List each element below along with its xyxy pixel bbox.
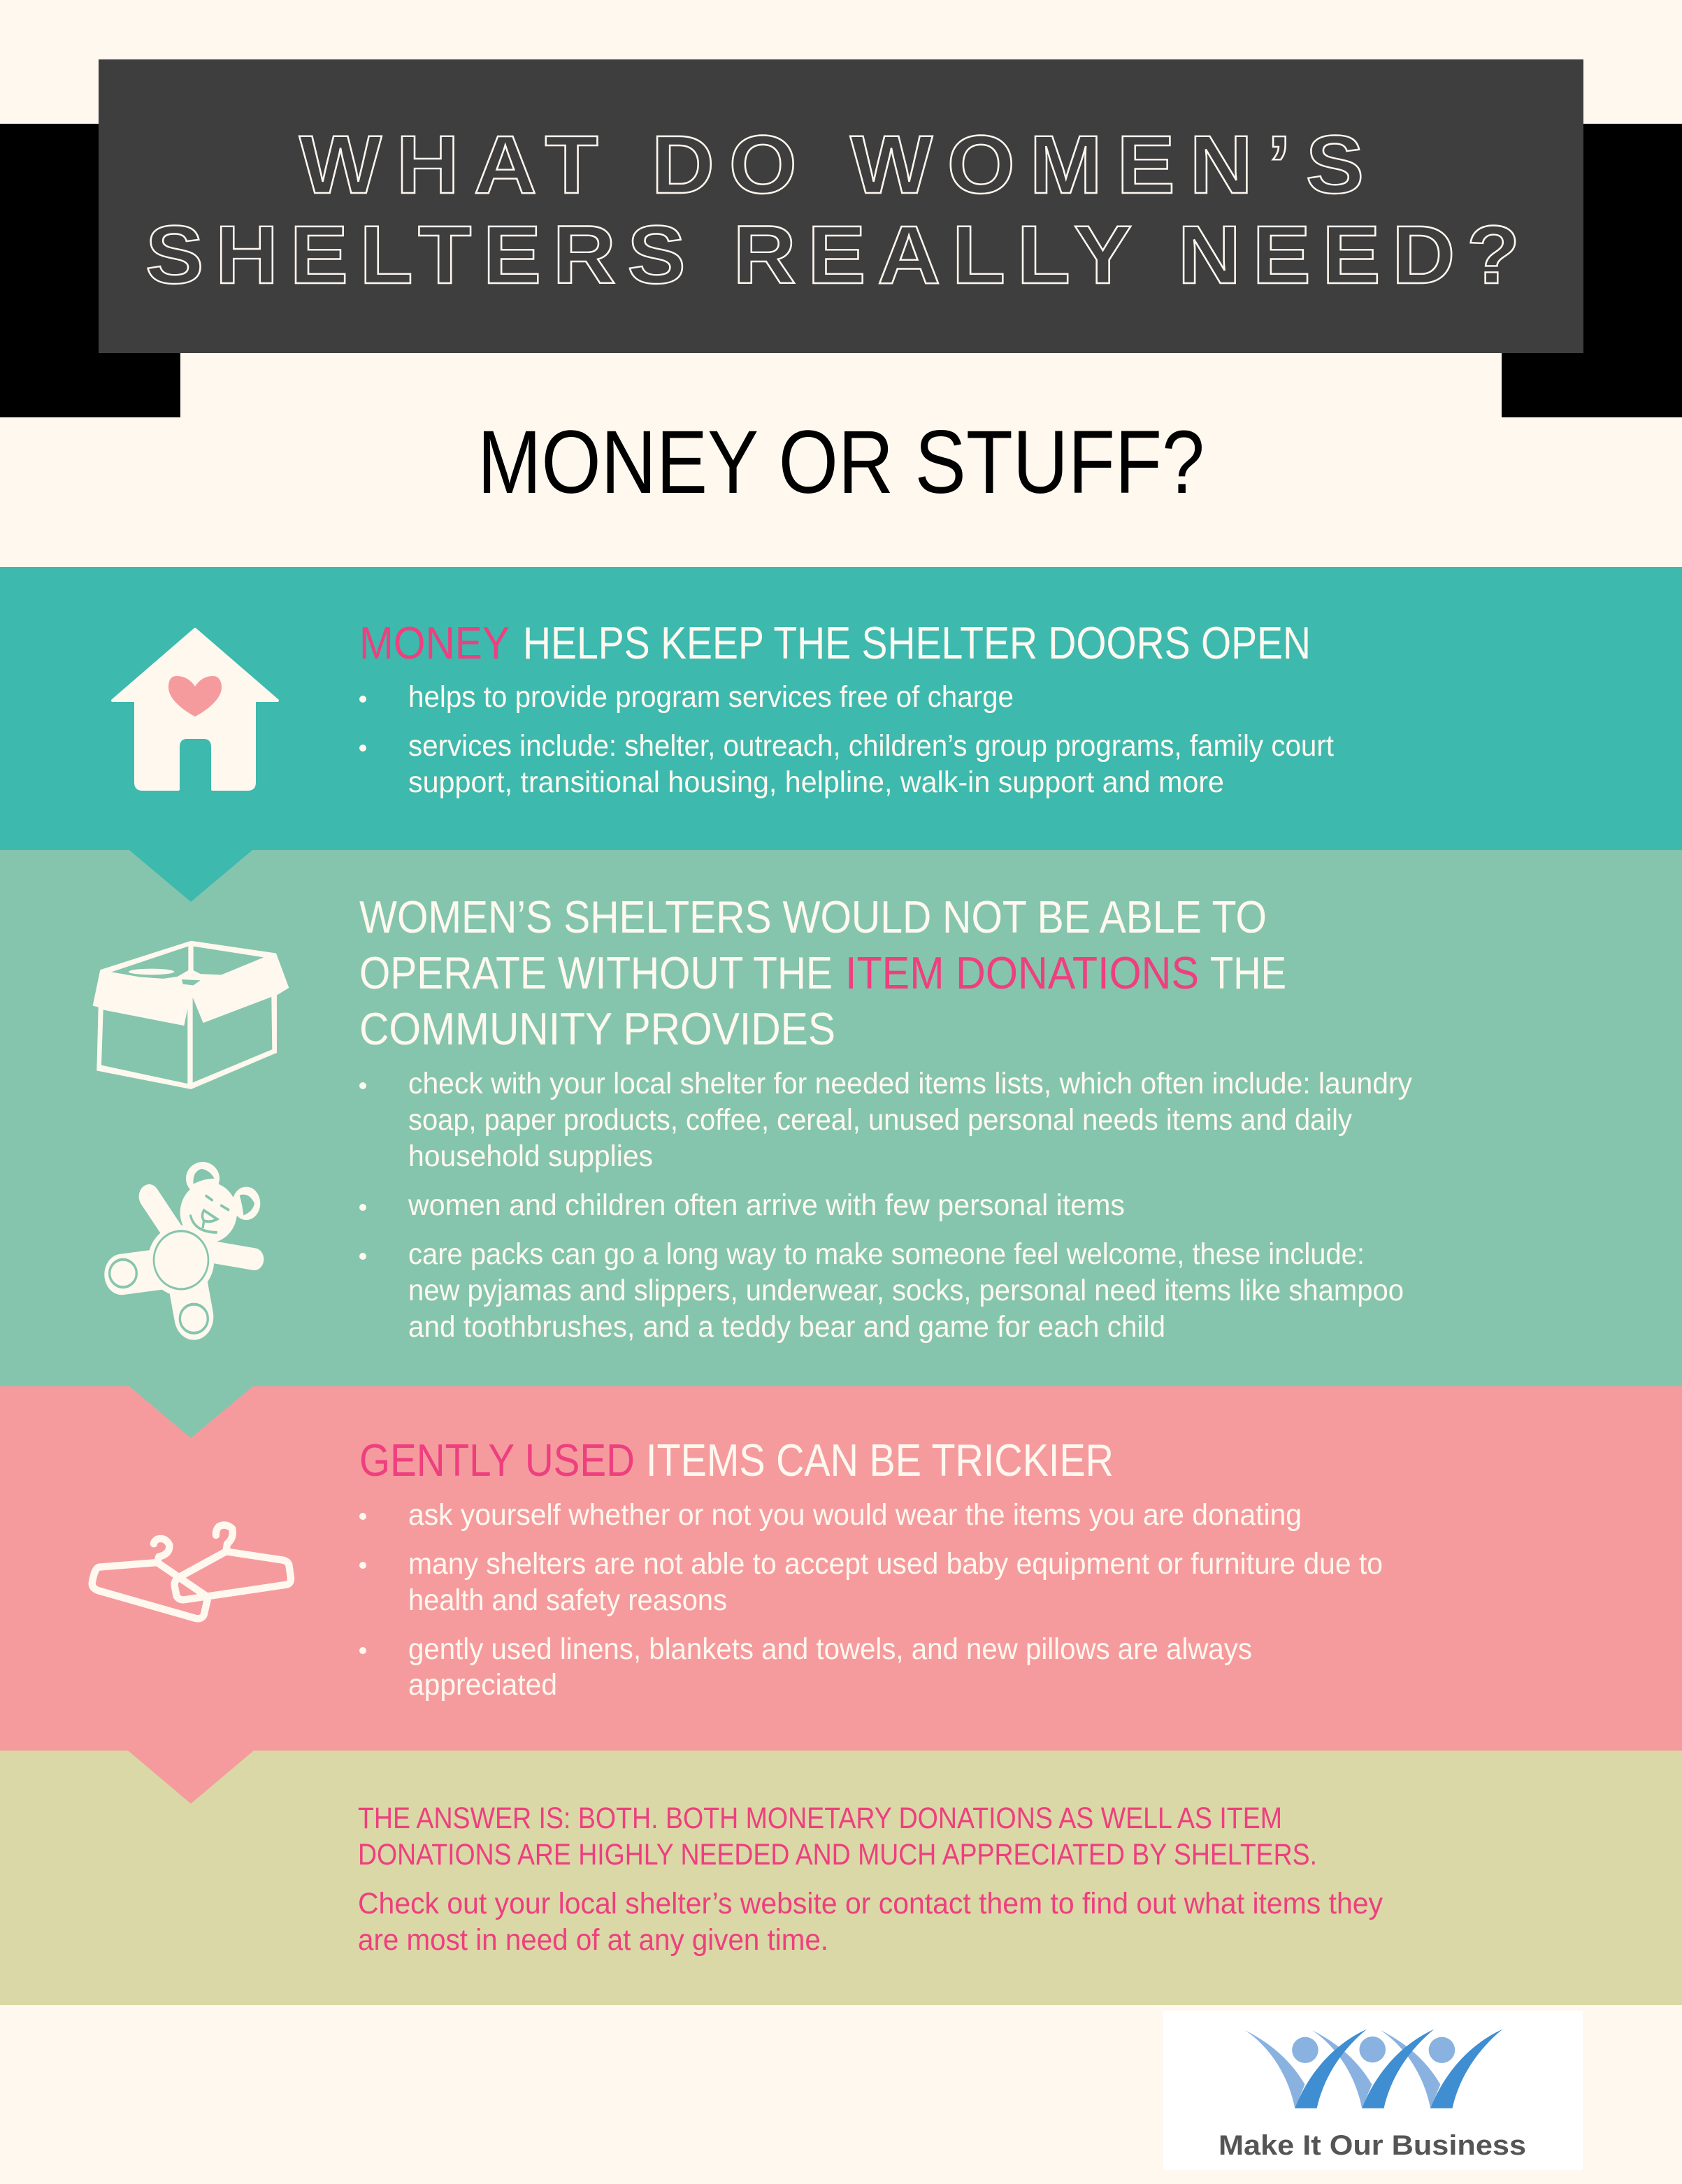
items bullet list: women and children often arrive with few personal items [408, 1188, 1125, 1222]
gently used bullet list: appreciated [408, 1668, 557, 1702]
items bullet list: new pyjamas and slippers, underwear, socks, personal need items like shampoo [408, 1274, 1404, 1307]
items bullet list: check with your local shelter for needed items lists, which often include: laundry [408, 1067, 1412, 1100]
gently used bullet list: gently used linens, blankets and towels, and new pillows are always [408, 1632, 1252, 1666]
gently used bullet list [359, 1498, 1383, 1702]
money bullet list: services include: shelter, outreach, children’s group programs, family court [408, 729, 1334, 763]
chevron: gently used to answer [128, 1751, 254, 1804]
heading: item donations: OPERATE WITHOUT THE [359, 947, 833, 998]
title: SHELTERS REALLY NEED? [145, 208, 1520, 301]
title [145, 118, 1520, 301]
items bullet list: care packs can go a long way to make someone feel welcome, these include: [408, 1237, 1365, 1271]
icon: open box [93, 941, 289, 1089]
heading: gently used [359, 1435, 1114, 1486]
heading: money: MONEY [359, 617, 510, 668]
heading: item donations: ITEM DONATIONS [845, 947, 1199, 998]
money bullet list: support, transitional housing, helpline, walk-in support and more [408, 766, 1224, 799]
panel: money [0, 567, 1682, 850]
icon: clothes hangers [92, 1525, 291, 1618]
answer text: THE ANSWER IS: BOTH. BOTH MONETARY DONATIONS AS WELL AS ITEM [358, 1802, 1282, 1835]
chevron: money to items [129, 850, 252, 902]
money bullet list [359, 680, 1334, 799]
heading: gently used: GENTLY USED [359, 1435, 635, 1486]
panel: gently used [0, 1386, 1682, 1751]
header banner [0, 59, 1682, 417]
answer text: Check out your local shelter’s website or contact them to find out what items they [358, 1887, 1383, 1920]
icon: teddy bear [110, 1162, 260, 1333]
heading: gently used: ITEMS CAN BE TRICKIER [646, 1435, 1114, 1486]
items bullet list: household supplies [408, 1140, 653, 1173]
title: WHAT DO WOMEN’S [299, 118, 1364, 210]
logo wordmark: Make It Our Business [1219, 2130, 1526, 2161]
heading: item donations: THE [1210, 947, 1286, 998]
gently used bullet list: many shelters are not able to accept used baby equipment or furniture due to [408, 1547, 1383, 1581]
chevron: items to gently used [129, 1386, 253, 1438]
logo mark [1245, 2029, 1502, 2108]
panel: the answer [0, 1751, 1682, 2005]
gently used bullet list: ask yourself whether or not you would wear the items you are donating [408, 1498, 1302, 1532]
heading: item donations [359, 891, 1286, 1054]
items bullet list: and toothbrushes, and a teddy bear and game for each child [408, 1310, 1165, 1344]
money bullet list: helps to provide program services free of charge [408, 680, 1014, 714]
answer text: are most in need of at any given time. [358, 1923, 828, 1957]
answer text: DONATIONS ARE HIGHLY NEEDED AND MUCH APPRECIATED BY SHELTERS. [358, 1838, 1317, 1872]
items bullet list: soap, paper products, coffee, cereal, unused personal needs items and daily [408, 1103, 1352, 1137]
heading: item donations: COMMUNITY PROVIDES [359, 1003, 835, 1054]
items bullet list [359, 1067, 1412, 1344]
heading: money: HELPS KEEP THE SHELTER DOORS OPEN [523, 617, 1311, 668]
gently used bullet list: health and safety reasons [408, 1583, 727, 1617]
subtitle: MONEY OR STUFF? [477, 412, 1205, 512]
answer text [358, 1802, 1383, 1957]
logo: Make It Our Business [1163, 2011, 1583, 2170]
heading: item donations: WOMEN’S SHELTERS WOULD NOT BE ABLE TO [359, 891, 1267, 942]
panel: item donations [0, 850, 1682, 1386]
icon: house with heart [113, 629, 278, 789]
